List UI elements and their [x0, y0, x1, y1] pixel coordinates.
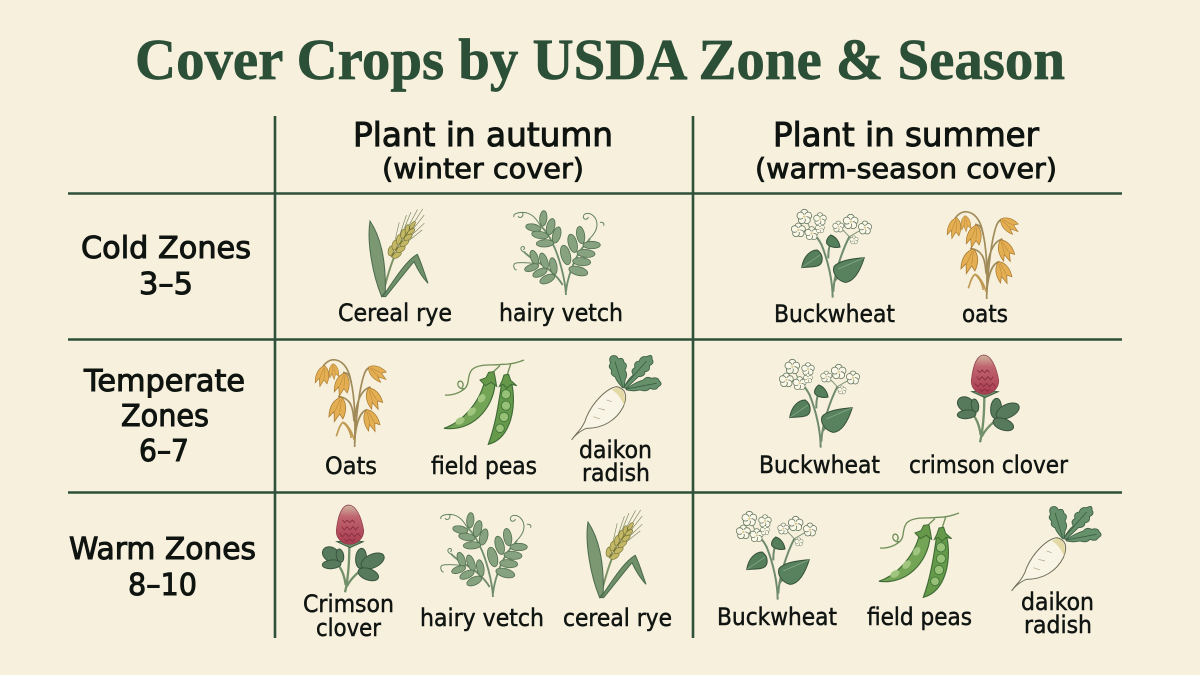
- row label: temperate zones: [83, 364, 245, 469]
- column header: plant in autumn: [353, 115, 613, 185]
- plant: field peas: [431, 360, 537, 480]
- plant: oats: [314, 360, 390, 480]
- plant: oats: Oats: [325, 452, 377, 480]
- plant: daikon radish: daikon: [1021, 588, 1094, 616]
- plant: crimson clover: [909, 355, 1068, 479]
- title: Cover Crops by USDA Zone & Season: [135, 27, 1065, 92]
- row label: cold zones: [81, 231, 251, 302]
- plant: crimson clover: clover: [316, 614, 381, 642]
- column header: plant in autumn: Plant in autumn: [353, 115, 613, 154]
- row label: cold zones: Cold Zones: [81, 231, 251, 266]
- row label: temperate zones: Zones: [121, 399, 209, 434]
- plant: buckwheat: Buckwheat: [759, 451, 880, 479]
- plant: field peas: field peas: [431, 452, 537, 480]
- plant: cereal rye: Cereal rye: [338, 299, 452, 327]
- plant: field peas: field peas: [867, 603, 972, 631]
- plant: hairy vetch: [420, 512, 544, 632]
- column header: plant in autumn: (winter cover): [382, 152, 584, 185]
- plant: buckwheat: [759, 359, 880, 479]
- cell: temperate, autumn: [314, 355, 661, 487]
- plant: hairy vetch: [499, 210, 623, 327]
- plant: buckwheat: [774, 209, 895, 328]
- cell: temperate, summer: [759, 355, 1068, 479]
- plant: crimson clover: crimson clover: [909, 451, 1068, 479]
- plant: daikon radish: [572, 355, 661, 487]
- row label: temperate zones: 6–7: [139, 434, 189, 469]
- plant: cereal rye: cereal rye: [563, 604, 672, 632]
- plant: buckwheat: [717, 511, 837, 631]
- column header: plant in summer: (warm-season cover): [755, 152, 1057, 185]
- row label: temperate zones: Temperate: [83, 364, 245, 399]
- cell: cold, summer: [774, 209, 1022, 328]
- row label: warm zones: Warm Zones: [69, 532, 256, 567]
- column header: plant in summer: Plant in summer: [773, 115, 1039, 154]
- cell: warm, autumn: [303, 503, 672, 642]
- plant: cereal rye: [338, 202, 452, 327]
- plant: field peas: [867, 513, 972, 631]
- plant: cereal rye: [563, 503, 672, 632]
- plant: buckwheat: Buckwheat: [717, 603, 837, 631]
- plant: daikon radish: daikon: [579, 436, 652, 464]
- plant: hairy vetch: hairy vetch: [499, 299, 623, 327]
- row label: warm zones: 8–10: [128, 568, 197, 603]
- column header: plant in summer: [755, 115, 1057, 185]
- cell: warm, summer: [717, 506, 1101, 639]
- plant: daikon radish: radish: [1024, 611, 1092, 639]
- plant: crimson clover: Crimson: [303, 590, 394, 618]
- plant: oats: [946, 212, 1022, 328]
- cell: cold, autumn: [338, 202, 623, 327]
- plant: oats: oats: [962, 300, 1008, 328]
- plant: buckwheat: Buckwheat: [774, 300, 895, 328]
- plant: hairy vetch: hairy vetch: [420, 604, 544, 632]
- plant: crimson clover: [303, 505, 394, 642]
- row label: warm zones: [69, 532, 256, 603]
- plant: daikon radish: [1012, 506, 1101, 639]
- row label: cold zones: 3–5: [139, 267, 193, 302]
- plant: daikon radish: radish: [582, 459, 650, 487]
